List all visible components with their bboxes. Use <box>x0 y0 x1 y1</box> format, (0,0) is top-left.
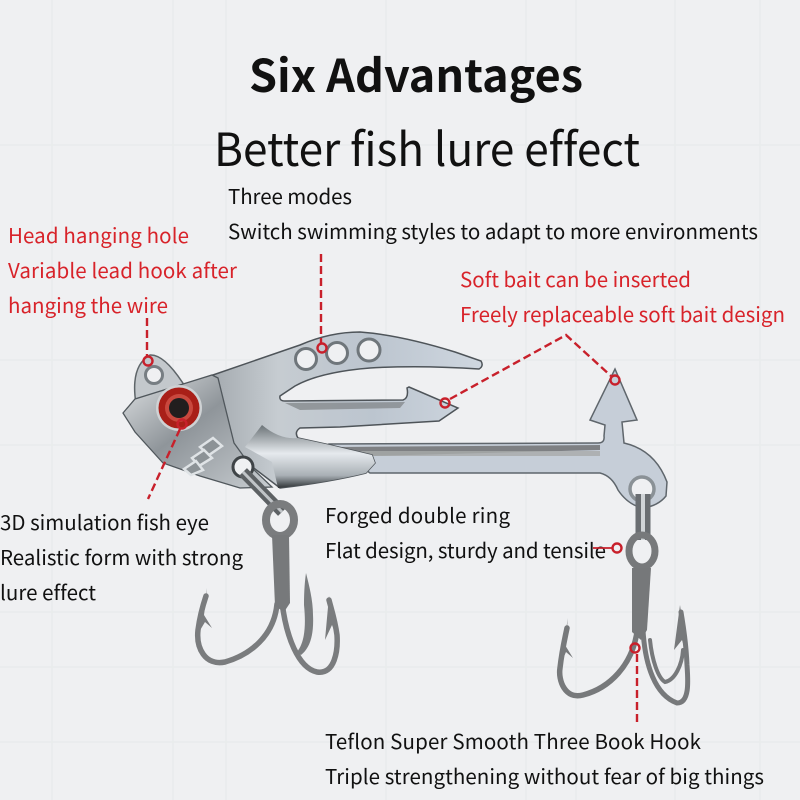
barb dark streak <box>285 402 405 410</box>
fish eye <box>156 385 202 431</box>
callout: fish eye: lure effect <box>0 576 96 606</box>
callout: treble hook <box>325 644 764 790</box>
back prong <box>297 573 313 655</box>
callout: forged double ring: Forged double ring <box>325 499 510 529</box>
left split ring <box>243 472 282 512</box>
body holes <box>296 339 380 370</box>
barbs <box>559 618 573 668</box>
title: Six Advantages <box>249 40 583 105</box>
lower body shine <box>245 425 375 488</box>
callout: head hanging hole <box>8 219 237 366</box>
jaw hook loop <box>233 457 253 477</box>
stem <box>272 535 290 612</box>
callout: soft bait: Soft bait can be inserted <box>460 263 691 293</box>
wing body with holes and barb <box>210 332 482 488</box>
callout: forged double ring <box>325 499 622 564</box>
callout: head hanging hole: hanging the wire <box>8 289 168 319</box>
head hanging ring <box>135 355 186 404</box>
callout: head hanging hole: Head hanging hole <box>8 219 189 249</box>
tail hole <box>630 477 654 501</box>
callout: soft bait <box>440 263 785 408</box>
head <box>123 375 272 488</box>
callout: three modes: Switch swimming styles to adapt to more environments <box>228 215 758 245</box>
callout: fish eye: Realistic form with strong <box>0 541 243 571</box>
right treble hook <box>559 535 688 703</box>
long arm and arrow tail <box>330 369 667 508</box>
barbs <box>199 588 212 632</box>
callout: fish eye <box>0 420 243 606</box>
right split ring <box>636 494 650 540</box>
callout: three modes <box>228 180 758 352</box>
callout: treble hook: Triple strengthening without fear of big things <box>325 760 764 790</box>
callout: treble hook: Teflon Super Smooth Three Book Hook <box>325 725 702 755</box>
left treble hook <box>198 504 338 672</box>
lure: metal body with arm and arrow tail <box>123 332 667 508</box>
callout: head hanging hole: Variable lead hook after <box>8 254 237 284</box>
callout: fish eye: 3D simulation fish eye <box>0 506 209 536</box>
subtitle: Better fish lure effect <box>214 114 640 180</box>
gill scales <box>184 438 222 475</box>
callout: soft bait: Freely replaceable soft bait design <box>460 298 785 328</box>
arm shading <box>340 445 600 456</box>
callout: forged double ring: Flat design, sturdy and tensile <box>325 534 606 564</box>
stem <box>632 568 651 640</box>
callout: three modes: Three modes <box>228 180 352 210</box>
